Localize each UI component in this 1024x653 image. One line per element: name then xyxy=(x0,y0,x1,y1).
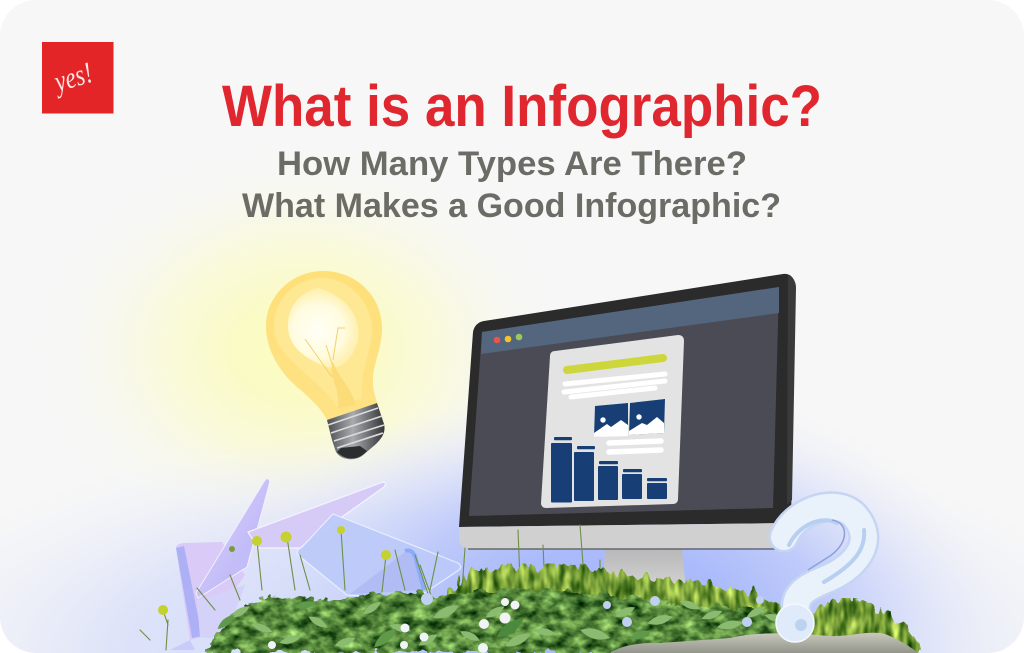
document text lines xyxy=(564,374,665,397)
monitor xyxy=(459,274,796,590)
infographic document xyxy=(541,335,684,508)
document images xyxy=(594,399,665,437)
weedy yellow-green grass xyxy=(440,564,790,640)
monitor screen xyxy=(469,287,779,516)
document heading bar xyxy=(567,358,663,370)
monitor chin xyxy=(459,523,791,549)
yellow flower buds xyxy=(158,526,391,615)
pale blue flowers xyxy=(421,593,764,627)
logo: Yes! badge: yes! xyxy=(48,56,96,99)
dark foliage base xyxy=(205,589,815,653)
white flowers xyxy=(268,598,520,653)
document caption lines xyxy=(609,441,661,452)
thin flower stems xyxy=(140,525,600,650)
monitor stand xyxy=(603,548,686,590)
grass mound xyxy=(140,525,925,653)
icon: glass paper crane xyxy=(170,479,461,650)
rock xyxy=(610,633,918,653)
window buttons xyxy=(494,334,522,343)
icon: glass question mark xyxy=(776,507,864,642)
bar chart xyxy=(551,437,667,502)
monitor side edge xyxy=(787,276,796,505)
logo: Yes! badge xyxy=(42,42,114,114)
title: What is an Infographic? xyxy=(222,74,822,139)
browser bar xyxy=(481,287,779,354)
icon: light bulb xyxy=(266,271,385,459)
subtitle line 2: What Makes a Good Infographic? xyxy=(242,187,781,225)
subtitle line 1: How Many Types Are There? xyxy=(277,145,747,183)
leaves xyxy=(215,598,787,651)
monitor bezel xyxy=(459,274,795,527)
